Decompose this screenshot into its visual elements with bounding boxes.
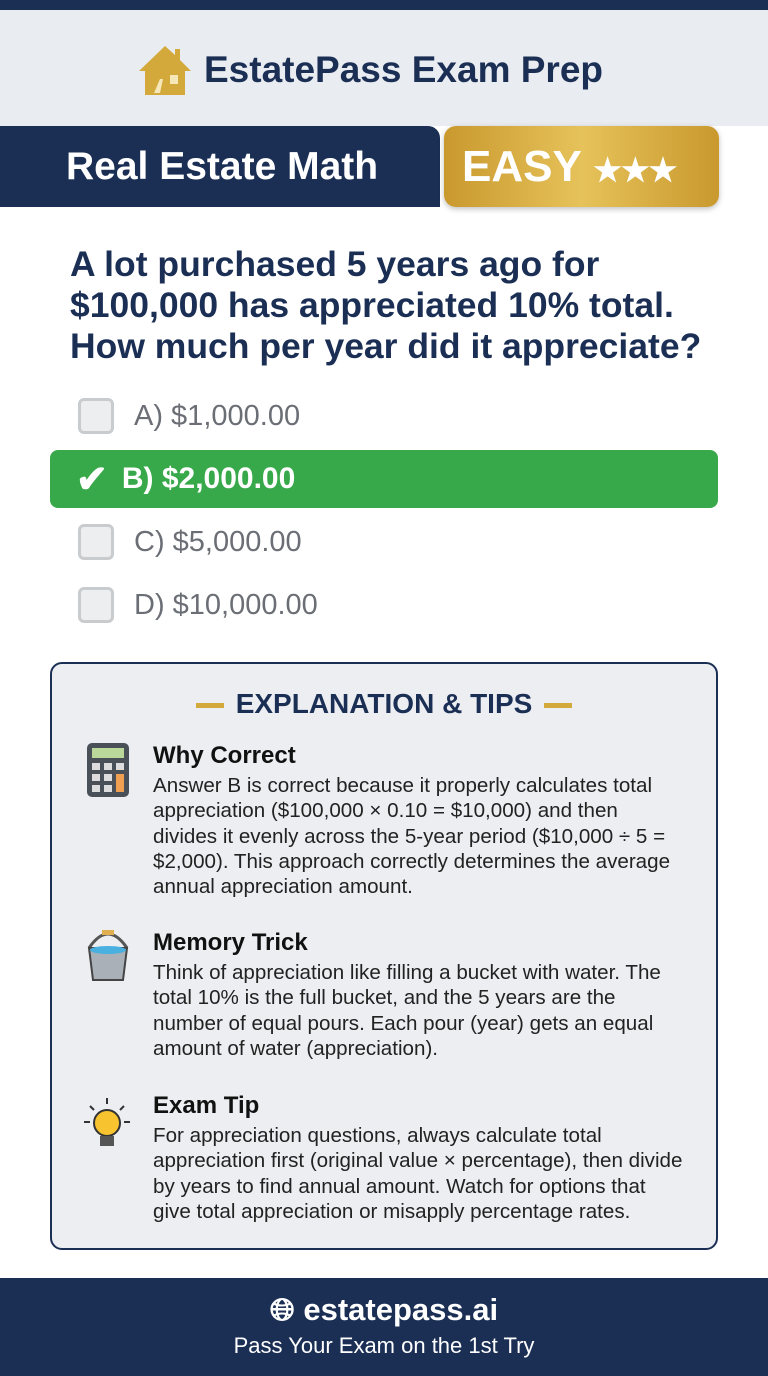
section: memory trick <box>153 929 661 1060</box>
logo: EstatePass Exam Prep <box>204 49 603 90</box>
question: $100,000 has appreciated 10% total. <box>70 285 674 325</box>
option D <box>78 587 318 623</box>
question: A lot purchased 5 years ago for <box>70 244 599 284</box>
category band <box>0 126 440 207</box>
category band: Real Estate Math <box>66 145 378 188</box>
icon: calculator <box>87 743 129 797</box>
section: memory trick: Memory Trick <box>153 929 308 956</box>
option A: A) $1,000.00 <box>134 400 300 432</box>
option D: D) $10,000.00 <box>134 588 318 620</box>
question <box>70 244 701 366</box>
section: memory trick: Think of appreciation like filling a bucket with water. The <box>153 961 661 984</box>
option B correct <box>50 450 718 508</box>
tagline: Pass Your Exam on the 1st Try <box>234 1333 534 1358</box>
option B correct: B) $2,000.00 <box>122 462 295 495</box>
section: why correct: Answer B is correct because it properly calculates total <box>153 774 652 797</box>
section: why correct: divides it evenly across the 5-year period ($10,000 ÷ 5 = <box>153 825 665 848</box>
header <box>0 10 768 126</box>
option C <box>78 524 302 560</box>
icon: lightbulb <box>84 1098 130 1146</box>
section: why correct: appreciation ($100,000 × 0.10 = $10,000) and then <box>153 799 618 822</box>
option C: C) $5,000.00 <box>134 526 302 558</box>
section: memory trick: amount of water (appreciation). <box>153 1037 438 1060</box>
section: exam tip: For appreciation questions, always calculate total <box>153 1124 602 1147</box>
panel: explanation <box>50 662 718 1250</box>
section: exam tip: by years to find annual amount. Watch for options that <box>153 1175 646 1198</box>
section: why correct: $2,000). This approach correctly determines the average <box>153 850 670 873</box>
question: How much per year did it appreciate? <box>70 326 701 366</box>
section: why correct: annual appreciation amount. <box>153 875 413 898</box>
section: exam tip: give total appreciation or misapply percentage rates. <box>153 1200 630 1223</box>
icon: house <box>139 46 191 95</box>
icon: bucket <box>88 930 128 981</box>
top bar <box>0 0 768 10</box>
option B correct: ✔ <box>76 458 108 500</box>
option A <box>78 398 300 434</box>
section: exam tip: Exam Tip <box>153 1092 259 1119</box>
difficulty badge <box>444 126 719 207</box>
section: memory trick: total 10% is the full bucket, and the 5 years are the <box>153 986 616 1009</box>
heading: EXPLANATION & TIPS <box>236 688 532 719</box>
section: exam tip <box>153 1092 682 1223</box>
footer url: 🌐︎ estatepass.ai <box>270 1292 498 1327</box>
section: memory trick: number of equal pours. Each pour (year) gets an equal <box>153 1012 653 1035</box>
footer <box>0 1278 768 1376</box>
section: exam tip: appreciation first (original value × percentage), then divide <box>153 1149 682 1172</box>
difficulty badge: EASY ★★★ <box>462 142 676 191</box>
section: why correct: Why Correct <box>153 742 296 769</box>
section: why correct <box>153 742 670 898</box>
